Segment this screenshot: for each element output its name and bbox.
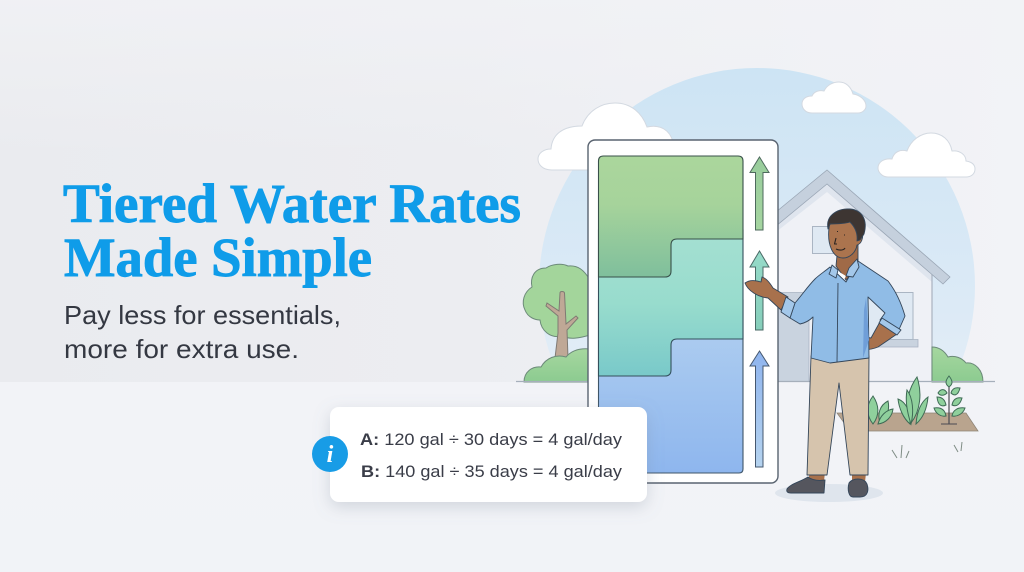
- window sill: [868, 340, 918, 347]
- tier: teal: [598, 230, 743, 376]
- house wall: [776, 186, 932, 382]
- cloud: right: [878, 133, 975, 177]
- tree trunk: [546, 292, 578, 358]
- head: [829, 218, 863, 258]
- arrow: teal: [750, 251, 769, 330]
- subtitle: Pay less for essentials,: [64, 300, 341, 330]
- title: [63, 173, 521, 288]
- subtitle: [64, 300, 341, 364]
- bush: left: [524, 349, 590, 382]
- left forearm and hand: [745, 277, 788, 310]
- arrow: green: [750, 157, 769, 230]
- panel frame: [588, 140, 778, 483]
- planter bed: [837, 413, 978, 431]
- title: Made Simple: [64, 227, 372, 288]
- ground line: [516, 380, 995, 382]
- tree: [523, 264, 590, 358]
- shirt: [790, 261, 905, 363]
- shirt placket: [837, 283, 838, 362]
- plant: spiky leaves: [898, 377, 928, 424]
- title: Tiered Water Rates: [63, 173, 521, 234]
- tier: blue: [598, 300, 743, 473]
- right shirt cuff: [879, 318, 901, 335]
- house: [776, 170, 950, 382]
- person: [745, 209, 905, 502]
- plant: sprig: [934, 376, 965, 424]
- ground shadow: [775, 484, 883, 502]
- undershirt: [836, 270, 846, 284]
- icon: info: [312, 436, 348, 472]
- shirt shading: [863, 298, 869, 358]
- roof underside shadow: [776, 184, 932, 282]
- cloud: left: [538, 103, 673, 170]
- left shirt cuff: [781, 297, 795, 318]
- roof: [776, 170, 950, 284]
- plant: broad leaves: [868, 396, 893, 424]
- tree crown: [523, 264, 590, 338]
- cloud: top right: [802, 82, 866, 113]
- bush: right: [932, 347, 983, 382]
- shoes: [787, 477, 868, 497]
- tier panel: [588, 140, 778, 483]
- hair: [828, 209, 865, 241]
- callout card: [312, 407, 647, 502]
- card background: [330, 407, 647, 502]
- neck: [836, 245, 858, 280]
- face details: [834, 232, 845, 250]
- right forearm and hand: [850, 320, 897, 350]
- subtitle: more for extra use.: [64, 334, 299, 364]
- lower window: [868, 292, 913, 340]
- door: [778, 292, 809, 382]
- planter with plants: [837, 376, 978, 458]
- line B: B: 140 gal ÷ 35 days = 4 gal/day: [361, 463, 623, 481]
- ankles: [808, 472, 866, 482]
- arrow: blue: [750, 351, 769, 467]
- sky circle: [540, 68, 975, 359]
- upper window: [812, 226, 834, 254]
- house wall edge: [931, 270, 933, 382]
- line A: A: 120 gal ÷ 30 days = 4 gal/day: [360, 431, 623, 449]
- icon: info: i: [327, 442, 334, 468]
- pants: [807, 356, 869, 475]
- infographic canvas: [63, 68, 995, 513]
- grass tufts: [892, 442, 962, 458]
- tier: green: [598, 156, 743, 277]
- collar: [829, 259, 859, 278]
